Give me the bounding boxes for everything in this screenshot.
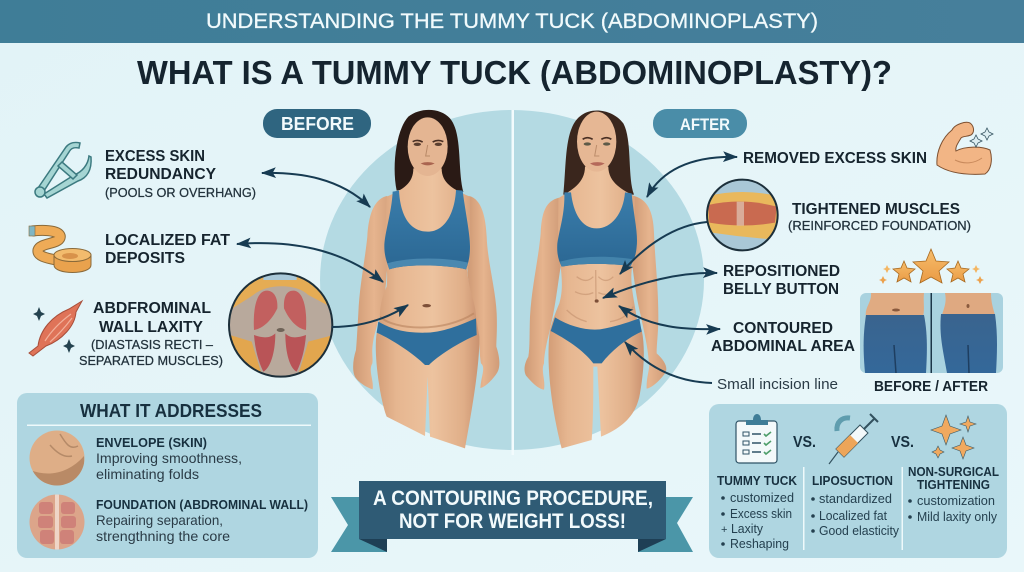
text: foundation abdominal wall <box>96 497 308 544</box>
heading: what it addresses: WHAT IT ADDRESSES <box>80 401 262 421</box>
column: tummy tuck: Laxity <box>731 521 763 536</box>
text: excess skin redundancy: REDUNDANCY <box>105 166 216 183</box>
text: localized fat deposits <box>105 232 230 267</box>
before label pill <box>263 109 371 138</box>
text: abdominal wall laxity: ABDFROMINAL <box>93 300 211 317</box>
text: repositioned belly button: BELLY BUTTON <box>723 281 839 298</box>
header bar: UNDERSTANDING THE TUMMY TUCK (ABDOMINOPLASTY) <box>206 10 818 33</box>
text: envelope skin: eliminating folds <box>96 466 199 482</box>
after figure <box>525 110 666 448</box>
text: contoured abdominal area: ABDOMINAL AREA <box>711 338 855 355</box>
text: envelope skin: Improving smoothness, <box>96 450 242 466</box>
icon: flexed arm <box>937 122 993 174</box>
column: tummy tuck: Reshaping <box>730 536 789 551</box>
column: non-surgical tightening: customization <box>917 493 995 508</box>
text: excess skin redundancy: EXCESS SKIN <box>105 148 205 165</box>
banner: contouring procedure: NOT FOR WEIGHT LOSS! <box>399 510 626 533</box>
arrows: before callouts <box>237 173 408 327</box>
column: liposuction <box>811 473 899 538</box>
text: repositioned belly button: REPOSITIONED <box>723 263 840 280</box>
column: tummy tuck: customized <box>730 490 794 505</box>
icon: sparkles <box>931 415 976 459</box>
text: contoured abdominal area <box>711 320 855 355</box>
image: separated abdominal muscles <box>227 270 337 380</box>
text: removed excess skin: REMOVED EXCESS SKIN <box>743 150 927 167</box>
icon: syringe <box>829 414 878 464</box>
header bar <box>0 0 1024 43</box>
arrows: after callouts <box>603 157 737 383</box>
text: abdominal wall laxity: WALL LAXITY <box>99 319 203 336</box>
image: abdominal wall muscles <box>29 494 85 550</box>
column: liposuction: LIPOSUCTION <box>812 473 893 488</box>
text: contoured abdominal area: CONTOURED <box>733 320 833 337</box>
text: envelope skin: ENVELOPE (SKIN) <box>96 435 207 450</box>
icon: muscle <box>29 301 82 356</box>
text: foundation abdominal wall: Repairing separation, <box>96 512 223 528</box>
before figure <box>353 110 499 448</box>
column: non-surgical tightening: TIGHTENING <box>917 477 990 492</box>
column: non-surgical tightening <box>908 464 999 524</box>
text: foundation abdominal wall: FOUNDATION (ABDROMINAL WALL) <box>96 497 308 512</box>
background ellipse behind figures <box>320 110 704 450</box>
image: before and after jeans photo <box>860 293 1003 373</box>
text: small incision line: Small incision line <box>717 376 838 393</box>
icon: measuring tape <box>29 226 91 272</box>
image: tightened muscles <box>705 178 780 253</box>
after label pill: AFTER <box>680 115 730 134</box>
title: WHAT IS A TUMMY TUCK (ABDOMINOPLASTY)? <box>137 54 892 91</box>
text: tightened muscles: TIGHTENED MUSCLES <box>792 201 960 218</box>
text: localized fat deposits: LOCALIZED FAT <box>105 232 230 249</box>
label: vs: VS. <box>793 434 816 451</box>
text: foundation abdominal wall: strengthning the core <box>96 528 230 544</box>
caption: before / after: BEFORE / AFTER <box>874 378 988 395</box>
column: tummy tuck: Excess skin <box>730 506 792 521</box>
column: liposuction: standardized <box>819 491 892 506</box>
text: abdominal wall laxity <box>79 300 223 368</box>
banner: contouring procedure: A CONTOURING PROCEDURE, <box>373 487 653 510</box>
text: localized fat deposits: DEPOSITS <box>105 250 185 267</box>
after label pill <box>653 109 747 138</box>
panel: what it addresses <box>17 393 318 558</box>
icon: rating stars <box>879 249 984 284</box>
image: skin envelope <box>29 430 85 486</box>
text: excess skin redundancy <box>105 148 256 200</box>
column: liposuction: Good elasticity <box>819 523 899 538</box>
panel: comparison <box>709 404 1007 558</box>
text: abdominal wall laxity: (DIASTASIS RECTI – <box>91 337 214 352</box>
column: non-surgical tightening: Mild laxity only <box>917 509 997 524</box>
icon: skin caliper <box>35 142 91 198</box>
text: excess skin redundancy: (POOLS OR OVERHANG) <box>105 185 256 200</box>
text: repositioned belly button <box>723 263 840 298</box>
banner: contouring procedure <box>331 481 693 552</box>
label: vs: VS. <box>891 434 914 451</box>
column: tummy tuck: TUMMY TUCK <box>717 473 798 488</box>
center divider <box>512 110 514 455</box>
column: non-surgical tightening: NON-SURGICAL <box>908 464 999 479</box>
text: envelope skin <box>96 435 242 482</box>
column: tummy tuck: + <box>721 524 727 536</box>
text: tightened muscles <box>788 201 971 233</box>
column: liposuction: Localized fat <box>819 508 887 523</box>
column: tummy tuck <box>717 473 798 551</box>
text: abdominal wall laxity: SEPARATED MUSCLES) <box>79 353 223 368</box>
text: tightened muscles: (REINFORCED FOUNDATION) <box>788 218 971 233</box>
icon: clipboard checklist <box>736 414 777 463</box>
before label pill: BEFORE <box>281 114 354 134</box>
